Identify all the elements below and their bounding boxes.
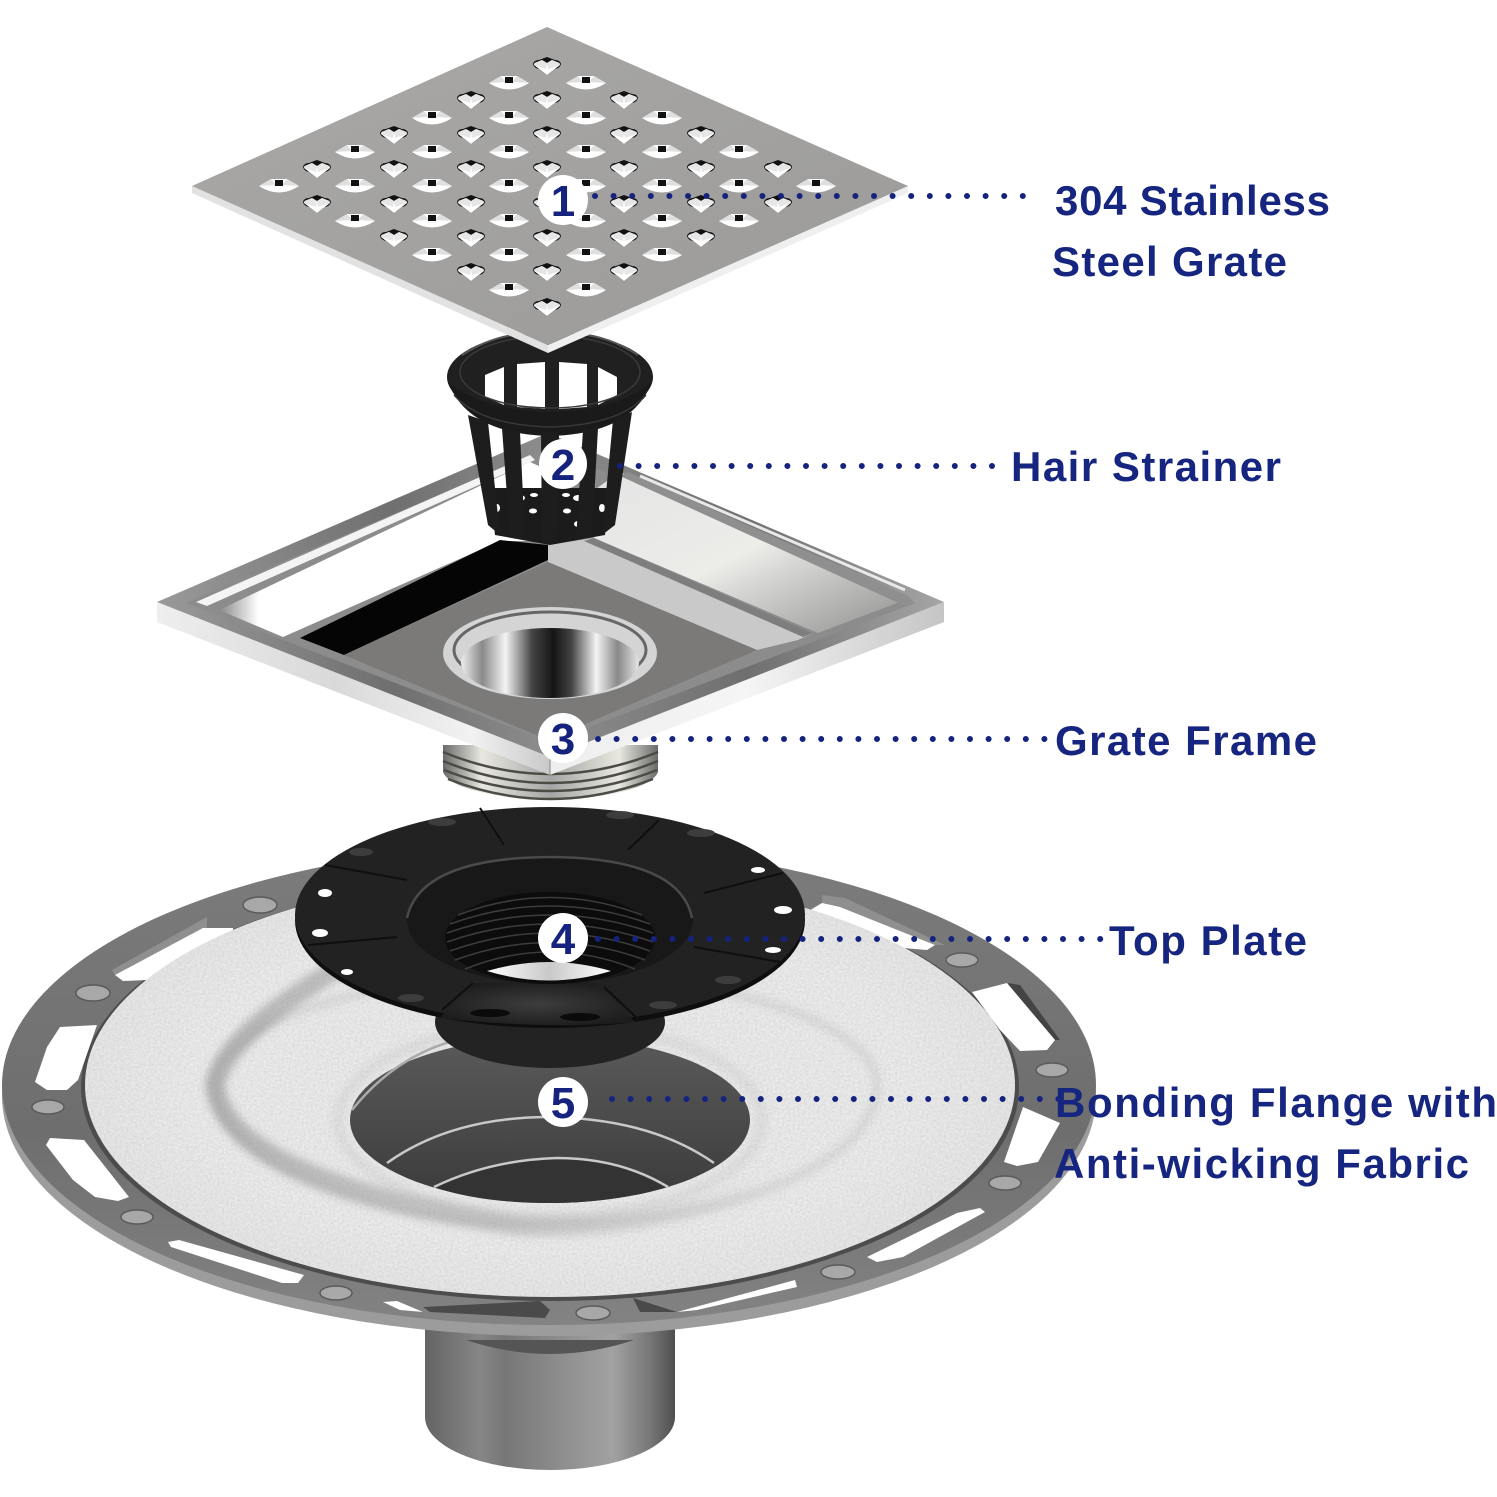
central well <box>350 1037 750 1203</box>
ribs <box>308 808 783 1020</box>
number badge 4: 4 <box>551 915 576 964</box>
part 3: grate frame <box>157 433 944 775</box>
funnel below plate <box>435 976 665 1068</box>
number badge 5: 5 <box>551 1079 575 1128</box>
grate holes <box>259 57 836 316</box>
plate slots <box>349 811 741 1021</box>
number badge 3: 3 <box>551 715 575 764</box>
threaded nipple <box>443 745 658 799</box>
raised inner ring <box>407 856 693 984</box>
frame floor <box>344 562 757 740</box>
leader line 4 <box>598 936 1102 942</box>
corner seam <box>549 757 551 775</box>
threaded throat <box>445 892 655 984</box>
flange slots left <box>35 917 550 1318</box>
leader line 5 <box>612 1096 1060 1102</box>
leader line 2 <box>620 463 995 469</box>
label: bonding flange with anti-wicking fabric: Anti-wicking Fabric <box>1054 1140 1469 1187</box>
front highlight segment <box>440 983 635 1025</box>
frame recess <box>186 448 915 742</box>
flange disc <box>295 807 805 1028</box>
part 5: bonding flange with pipe <box>2 845 1096 1470</box>
drain pipe <box>425 1320 675 1470</box>
number badge 1 <box>538 175 588 226</box>
flange slots right <box>633 895 1060 1312</box>
label: 304 stainless steel grate: 304 Stainless <box>1055 177 1330 224</box>
label: hair strainer: Hair Strainer <box>1011 443 1281 490</box>
label: 304 stainless steel grate: Steel Grate <box>1052 238 1287 285</box>
strainer lower mesh <box>490 488 610 545</box>
grate edges <box>192 186 908 353</box>
label: bonding flange with anti-wicking fabric: Bonding Flange with <box>1055 1079 1497 1126</box>
grate plate top <box>192 27 908 345</box>
number badge 4 <box>538 913 588 964</box>
strainer front bars <box>468 412 632 542</box>
flange screw dimples <box>32 897 1068 1320</box>
frame rim top <box>157 433 944 757</box>
part 2: hair strainer <box>447 332 653 545</box>
black inner wall <box>300 540 548 655</box>
label: grate frame: Grate Frame <box>1055 717 1317 764</box>
label: top plate: Top Plate <box>1109 917 1307 964</box>
mounting holes <box>312 867 792 975</box>
anti-wicking fabric <box>85 870 1015 1300</box>
label: 304 stainless steel grate <box>1052 177 1330 285</box>
number badge 5 <box>538 1077 588 1128</box>
number badge 2: 2 <box>551 441 575 490</box>
label: bonding flange with anti-wicking fabric <box>1054 1079 1497 1187</box>
frame front faces <box>157 602 944 775</box>
number badge 1: 1 <box>551 177 575 226</box>
leader line 1 <box>595 193 1040 199</box>
right wall <box>548 472 915 650</box>
flange ring <box>2 845 1096 1336</box>
part 4: black top plate <box>295 807 805 1068</box>
strainer top ring <box>447 332 653 436</box>
number badge 2 <box>539 439 587 490</box>
number badge 3 <box>538 713 588 764</box>
left wall with rails <box>196 455 548 637</box>
leader line 3 <box>598 736 1046 742</box>
floor drain opening <box>442 606 658 700</box>
part 1: stainless steel grate <box>192 27 908 353</box>
